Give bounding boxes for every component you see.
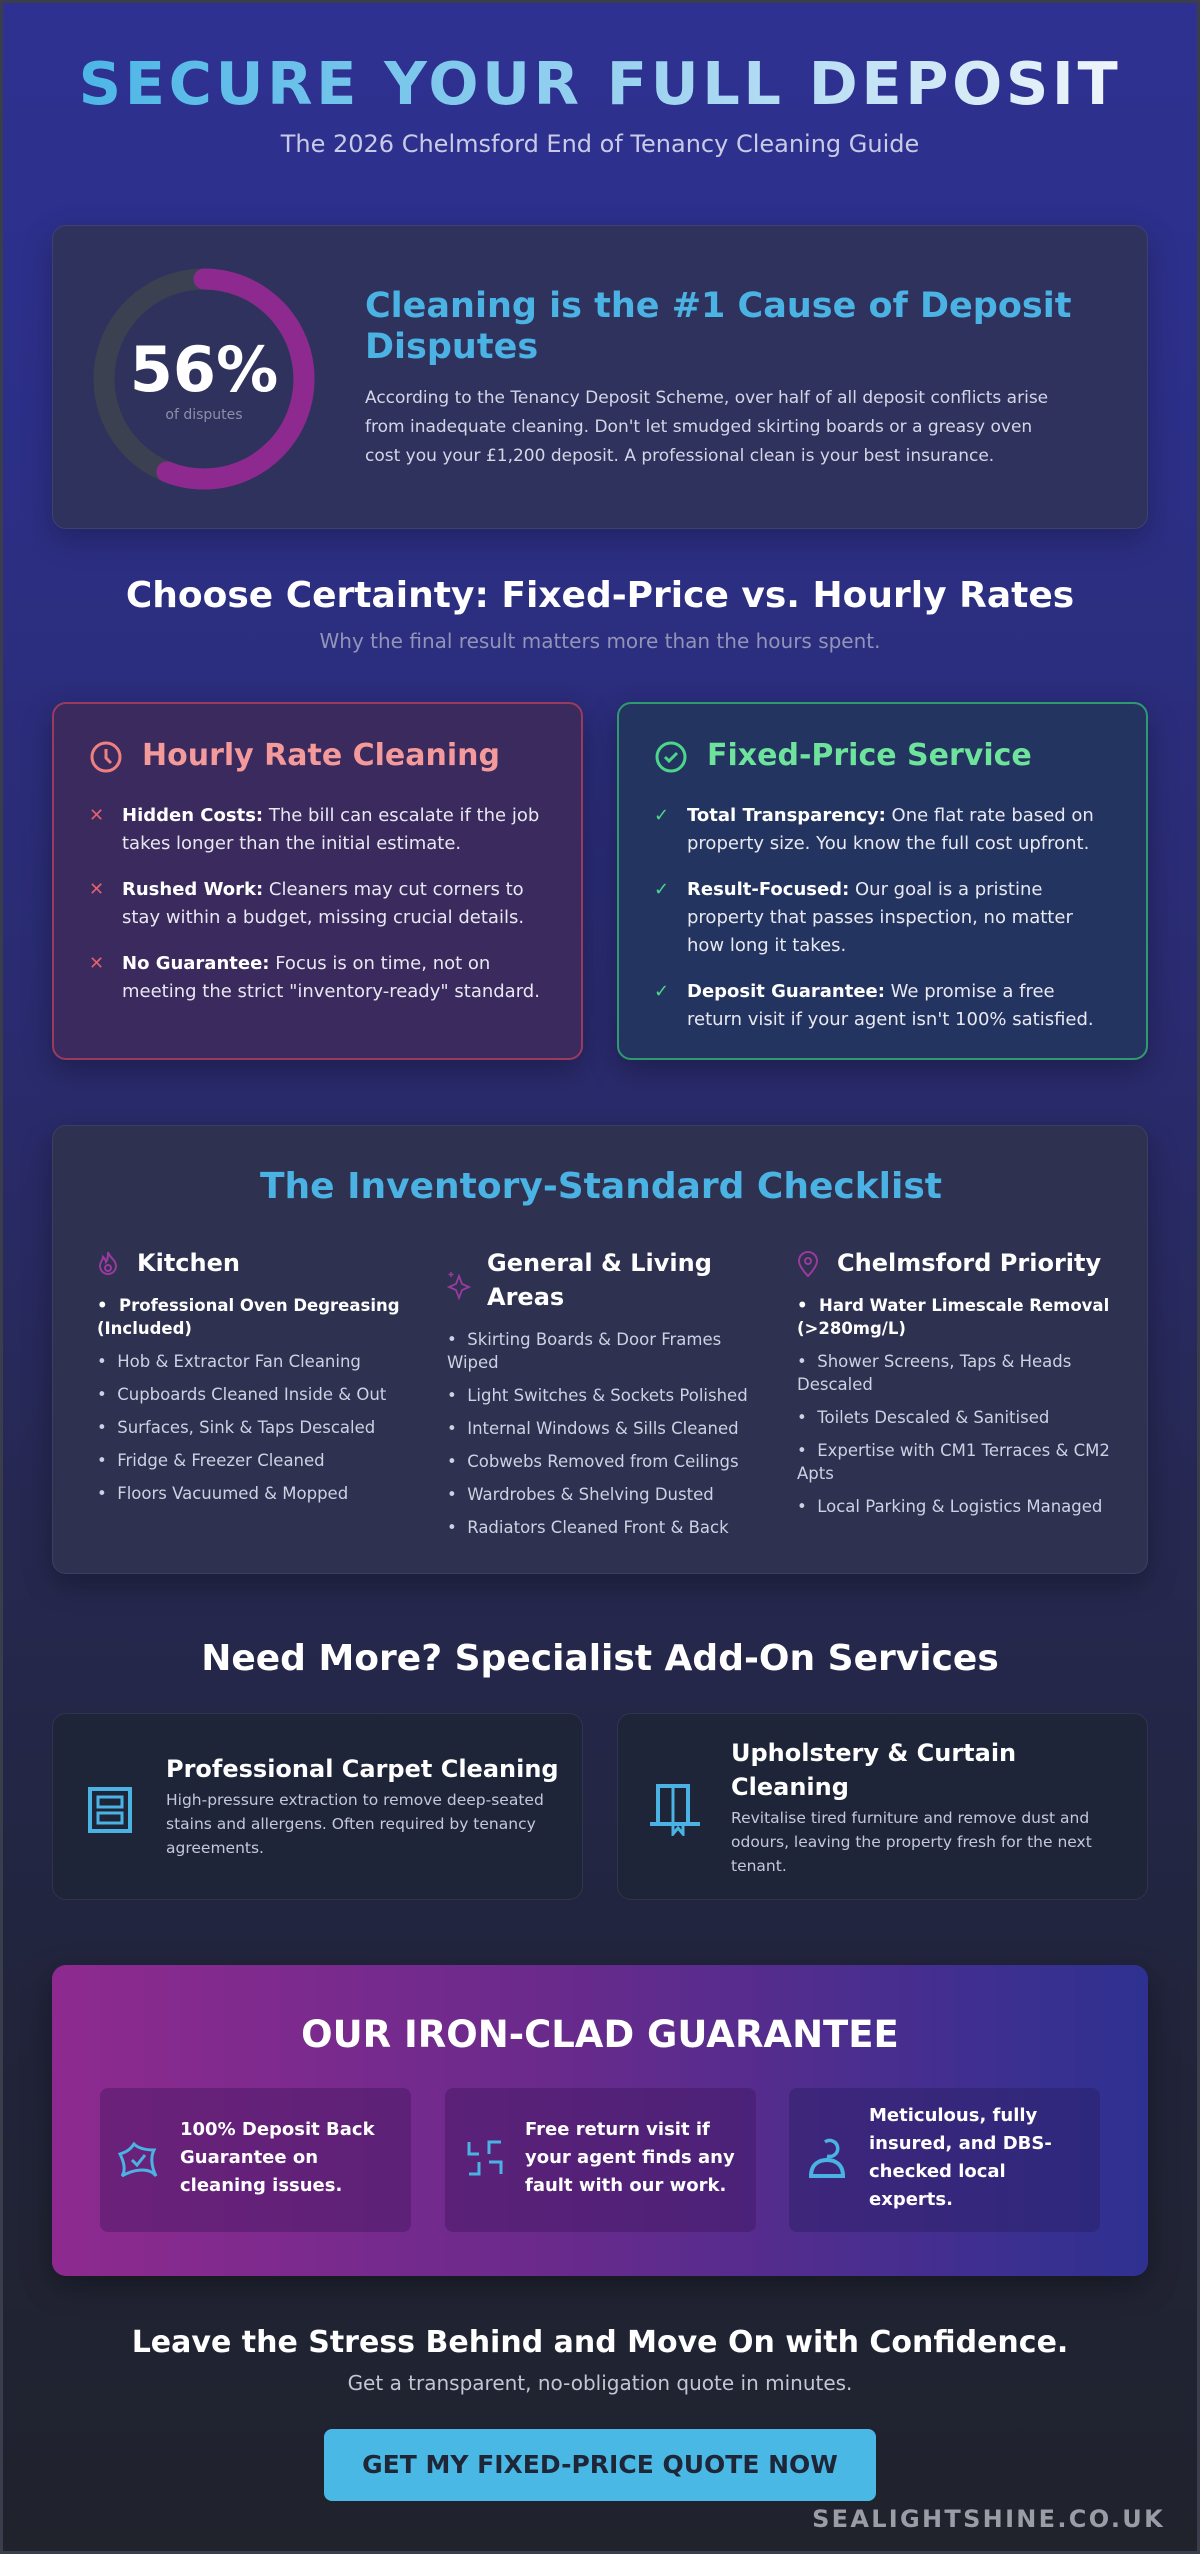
- text: upholstery: Revitalise tired furniture and remove dust and odours, leaving the property fresh for the next tenant.: [731, 1809, 1092, 1875]
- text: upholstery: [731, 1739, 1092, 1875]
- subheading: Why the final result matters more than the hours spent.: [320, 629, 880, 653]
- list: fixed pros: Deposit Guarantee: We promise a free return visit if your agent isn't 100% satisfied.: [687, 981, 1094, 1030]
- list: fixed pros: ✓: [654, 879, 669, 900]
- text: explanation: from inadequate cleaning. Don't let smudged skirting boards or a greasy oven: [365, 417, 1032, 437]
- subtitle: The 2026 Chelmsford End of Tenancy Cleaning Guide: [281, 130, 919, 158]
- panel: hourly: [52, 702, 583, 1060]
- list: fixed pros: Total Transparency: One flat rate based on property size. You know the full cost upfront.: [687, 805, 1094, 854]
- text: carpet: [166, 1755, 559, 1857]
- heading: hourly: Hourly Rate Cleaning: [142, 738, 500, 773]
- icon: carpet: [88, 1787, 132, 1833]
- icon: person: [809, 2138, 845, 2178]
- column: kitchen: • Fridge & Freezer Cleaned: [97, 1451, 325, 1470]
- list: fixed pros: ✓: [654, 981, 669, 1002]
- text: upholstery: Upholstery & Curtain Cleaning: [731, 1739, 1016, 1801]
- chart: donut 56%: of disputes: [165, 407, 243, 423]
- chart: donut 56%: 56%: [130, 333, 278, 406]
- list: hourly cons: [89, 805, 540, 1002]
- heading: fixed: Fixed-Price Service: [707, 738, 1032, 773]
- column: general: • Internal Windows & Sills Cleaned: [447, 1419, 739, 1438]
- icon: curtain: [650, 1784, 700, 1836]
- box: deposit back: 100% Deposit Back Guarantee on cleaning issues.: [180, 2119, 375, 2196]
- column: kitchen: • Hob & Extractor Fan Cleaning: [97, 1352, 361, 1371]
- column: kitchen: • Surfaces, Sink & Taps Descaled: [97, 1418, 375, 1437]
- heading: add-ons: Need More? Specialist Add-On Services: [201, 1638, 999, 1679]
- column: kitchen: • Floors Vacuumed & Mopped: [97, 1484, 348, 1503]
- icon: clock: [90, 742, 122, 772]
- footer: brand: SEALIGHTSHINE.CO.UK: [812, 2505, 1165, 2533]
- column: chelmsford: • Expertise with CM1 Terraces & CM2 Apts: [797, 1441, 1110, 1483]
- column: general: • Radiators Cleaned Front & Back: [447, 1518, 729, 1537]
- list: fixed pros: ✓: [654, 805, 669, 826]
- list: fixed pros: Result-Focused: Our goal is a pristine property that passes inspection, no matter how long it takes.: [687, 879, 1073, 956]
- heading: choose certainty: Choose Certainty: Fixed-Price vs. Hourly Rates: [126, 575, 1074, 616]
- icon: sparkle: [447, 1272, 471, 1300]
- column: kitchen: • Cupboards Cleaned Inside & Out: [97, 1385, 386, 1404]
- panel: fixed price: [617, 702, 1148, 1060]
- panel: checklist: [52, 1125, 1148, 1574]
- heading: cleaning cause: Cleaning is the #1 Cause of Deposit Disputes: [365, 286, 1071, 367]
- list: hourly cons: ✕: [89, 879, 104, 900]
- column: general: • Skirting Boards & Door Frames Wiped: [447, 1330, 721, 1372]
- panel: carpet cleaning: [52, 1713, 583, 1900]
- column: chelmsford: • Local Parking & Logistics Managed: [797, 1497, 1102, 1516]
- box: insured experts: [789, 2088, 1100, 2232]
- column: chelmsford: • Shower Screens, Taps & Heads Descaled: [797, 1352, 1071, 1394]
- box: free return: [445, 2088, 756, 2232]
- list: hourly cons: ✕: [89, 805, 104, 826]
- heading: closing: Leave the Stress Behind and Move On with Confidence.: [132, 2325, 1068, 2360]
- column: kitchen: • Professional Oven Degreasing (Included): [97, 1296, 400, 1338]
- panel: stat card: [52, 225, 1148, 529]
- column: chelmsford: [797, 1249, 1110, 1516]
- icon: map pin: [798, 1251, 818, 1278]
- column: chelmsford: Chelmsford Priority: [837, 1249, 1101, 1277]
- heading: guarantee: OUR IRON-CLAD GUARANTEE: [301, 2013, 899, 2056]
- title: SECURE YOUR FULL DEPOSIT: [79, 49, 1121, 118]
- heading: checklist: The Inventory-Standard Checklist: [260, 1166, 942, 1207]
- icon: corners: [468, 2140, 502, 2176]
- text: closing sub: Get a transparent, no-obligation quote in minutes.: [348, 2371, 852, 2395]
- text: explanation: cost you your £1,200 deposit. A professional clean is your best insurance.: [365, 446, 994, 466]
- icon: flame: [99, 1252, 117, 1275]
- column: general: [447, 1249, 748, 1537]
- list: hourly cons: Rushed Work: Cleaners may cut corners to stay within a budget, missing crucial details.: [122, 879, 524, 928]
- text: carpet: High-pressure extraction to remove deep-seated stains and allergens. Often required by tenancy agreements.: [166, 1791, 544, 1857]
- text: explanation: [365, 388, 1048, 466]
- icon: check circle: [656, 742, 686, 772]
- column: kitchen: Kitchen: [137, 1249, 240, 1277]
- list: fixed pros: [654, 805, 1094, 1030]
- list: hourly cons: No Guarantee: Focus is on time, not on meeting the strict "inventory-ready" standard.: [122, 953, 540, 1002]
- button: CTA: GET MY FIXED-PRICE QUOTE NOW: [362, 2450, 838, 2479]
- text: explanation: According to the Tenancy Deposit Scheme, over half of all deposit conflicts arise: [365, 388, 1048, 408]
- text: carpet: Professional Carpet Cleaning: [166, 1755, 559, 1783]
- column: chelmsford: • Hard Water Limescale Removal (>280mg/L): [797, 1296, 1109, 1338]
- button: CTA: [324, 2429, 876, 2501]
- column: general: • Wardrobes & Shelving Dusted: [447, 1485, 714, 1504]
- column: general: • Light Switches & Sockets Polished: [447, 1386, 748, 1405]
- panel: upholstery: [617, 1713, 1148, 1900]
- icon: shield check: [118, 2142, 158, 2178]
- column: general: General & Living Areas: [487, 1249, 712, 1311]
- list: hourly cons: ✕: [89, 953, 104, 974]
- column: general: • Cobwebs Removed from Ceilings: [447, 1452, 739, 1471]
- column: kitchen: [97, 1249, 400, 1503]
- panel: guarantee: [52, 1965, 1148, 2276]
- column: chelmsford: • Toilets Descaled & Sanitised: [797, 1408, 1049, 1427]
- list: hourly cons: Hidden Costs: The bill can escalate if the job takes longer than the initial estimate.: [122, 805, 539, 854]
- box: free return: Free return visit if your agent finds any fault with our work.: [525, 2119, 735, 2196]
- chart: donut 56%: [94, 268, 314, 490]
- box: insured experts: Meticulous, fully insured, and DBS-checked local experts.: [869, 2105, 1052, 2210]
- box: deposit back: [100, 2088, 411, 2232]
